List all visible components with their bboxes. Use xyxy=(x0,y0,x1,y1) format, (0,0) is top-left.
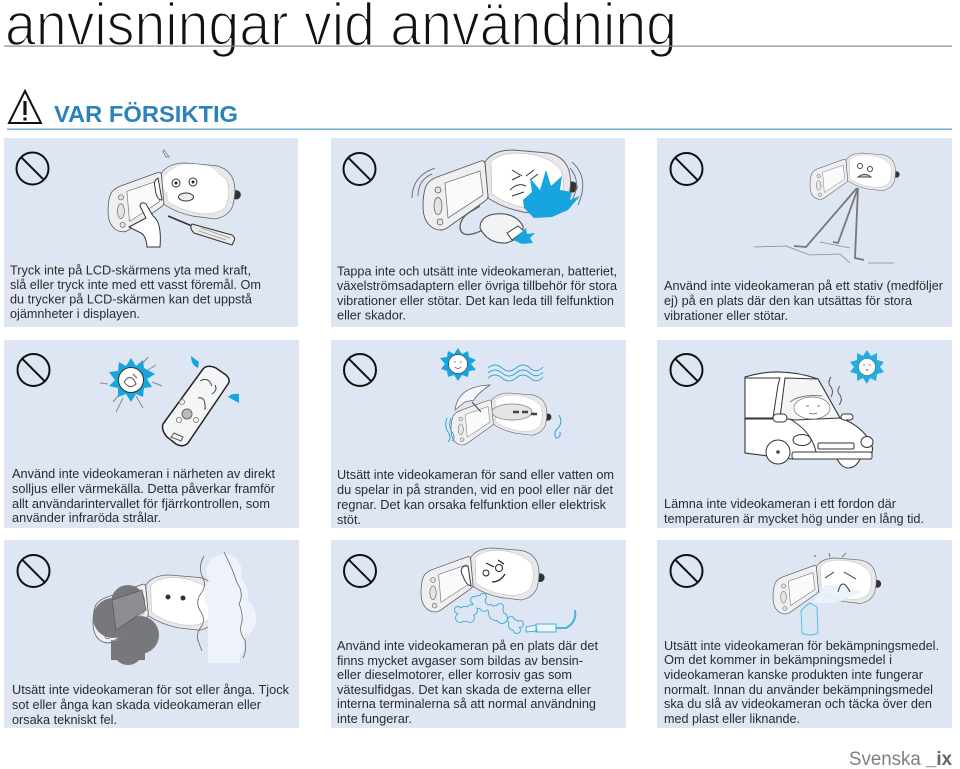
illustration: camera and adapter with impact xyxy=(412,150,583,244)
illustration: sun, waves, umbrella and camera xyxy=(440,348,561,445)
icon: prohibition xyxy=(670,153,702,185)
text block: stöt. xyxy=(337,513,361,527)
text block: sot eller ånga kan skada videokameran eller xyxy=(12,698,261,712)
text block: vätesulfidgas. Det kan skada de externa eller xyxy=(337,683,591,697)
text block: vibrationer eller stötar. xyxy=(664,309,788,323)
icon: prohibition xyxy=(670,555,702,587)
icon: prohibition xyxy=(344,354,376,386)
text block xyxy=(664,497,924,526)
text block xyxy=(664,639,939,726)
text block xyxy=(12,683,290,727)
text block: ska du slå av videokameran och täcka över den xyxy=(664,697,932,711)
text block: allt användarintervallet för fjärrkontrollen, som xyxy=(12,497,270,511)
text block: vibrationer eller stötar. Det kan leda till felfunktion xyxy=(337,294,614,308)
text block: videokameran kanske produkten inte fungerar xyxy=(664,668,923,682)
panel background xyxy=(331,138,625,327)
panel background xyxy=(657,540,952,728)
panel background xyxy=(331,340,626,528)
text block: Använd inte videokameran på ett stativ (medföljer xyxy=(664,279,943,293)
panel: exhaust gases xyxy=(331,540,626,728)
text block: Använd inte videokameran i närheten av direkt xyxy=(12,467,276,481)
panel: soot and steam xyxy=(4,540,299,728)
icon: warning triangle xyxy=(9,91,41,123)
text block: växelströmsadaptern eller övriga tillbehör för stora xyxy=(337,279,617,293)
text block: temperaturen är mycket hög under en lång tid. xyxy=(664,512,924,526)
text block: finns mycket avgaser som bildas av bensin- xyxy=(337,654,583,668)
panel: sand and water xyxy=(331,340,626,528)
icon: prohibition xyxy=(344,153,376,185)
text block: Tappa inte och utsätt inte videokameran, batteriet, xyxy=(337,264,617,278)
icon: prohibition xyxy=(344,555,376,587)
text block: med plast eller liknande. xyxy=(664,712,800,726)
panel background xyxy=(657,340,952,528)
illustration: camera on tripod xyxy=(754,153,900,263)
panel background xyxy=(4,340,299,528)
text block: Lämna inte videokameran i ett fordon där xyxy=(664,497,896,511)
illustration: camera with exhaust pipe and clouds xyxy=(421,548,575,634)
icon: prohibition xyxy=(670,354,702,386)
text block: regnar. Det kan orsaka felfunktion eller elektrisk xyxy=(337,498,607,512)
text block: ojämnheter i displayen. xyxy=(10,307,140,321)
illustration: camera between soot and steam clouds xyxy=(93,552,256,665)
text block xyxy=(664,279,943,323)
panel: tripod xyxy=(657,138,952,327)
text block: du spelar in på stranden, vid en pool eller när det xyxy=(337,483,614,497)
panel: drop and shock xyxy=(331,138,625,327)
panel: insecticide xyxy=(657,540,952,728)
text block xyxy=(10,264,261,321)
text block xyxy=(337,264,617,322)
panel: hot car xyxy=(657,340,952,528)
text block xyxy=(12,467,276,525)
text block: Tryck inte på LCD-skärmens yta med kraft, xyxy=(10,264,251,278)
text block xyxy=(337,639,599,726)
icon: prohibition xyxy=(18,555,50,587)
icon: prohibition xyxy=(16,152,48,184)
illustration: sun and remote control xyxy=(100,356,239,446)
text block: normalt. Innan du använder bekämpningsmedel xyxy=(664,683,933,697)
panel: sunlight and remote xyxy=(4,340,299,528)
heading: VAR FÖRSIKTIG: VAR FÖRSIKTIG xyxy=(54,101,238,127)
text block: eller dieselmotorer, eller korrosiv gas som xyxy=(337,668,572,682)
text block: solljus eller värmekälla. Detta påverkar framför xyxy=(12,482,275,496)
illustration: camera sprayed with insecticide xyxy=(773,553,881,635)
icon: prohibition xyxy=(18,354,50,386)
illustration: sun and car with camera xyxy=(745,350,884,468)
text block: använder infraröda strålar. xyxy=(12,511,161,525)
text block: Använd inte videokameran på en plats där det xyxy=(337,639,599,653)
panel background xyxy=(4,540,299,728)
text block: orsaka tekniskt fel. xyxy=(12,713,117,727)
text block: eller skador. xyxy=(337,308,406,322)
panel background xyxy=(4,138,298,327)
text block: du trycker på LCD-skärmen kan det uppstå xyxy=(10,292,252,306)
text block: Utsätt inte videokameran för bekämpningsmedel. xyxy=(664,639,939,653)
panel background xyxy=(657,138,952,327)
text block: Om det kommer in bekämpningsmedel i xyxy=(664,653,892,667)
text block xyxy=(337,468,614,527)
text block: interna terminalerna så att normal användning xyxy=(337,697,596,711)
text block: inte fungerar. xyxy=(337,712,412,726)
illustration: camera pressed by finger and screwdriver xyxy=(108,150,241,247)
text block: ej) på en plats där den kan utsättas för stora xyxy=(664,294,912,308)
text block: Utsätt inte videokameran för sand eller vatten om xyxy=(337,468,614,482)
panel: press on LCD xyxy=(4,138,298,327)
panel background xyxy=(331,540,626,728)
text block: slå eller tryck inte med ett vasst föremål. Om xyxy=(10,278,261,292)
text block: Utsätt inte videokameran för sot eller ånga. Tjock xyxy=(12,683,290,697)
